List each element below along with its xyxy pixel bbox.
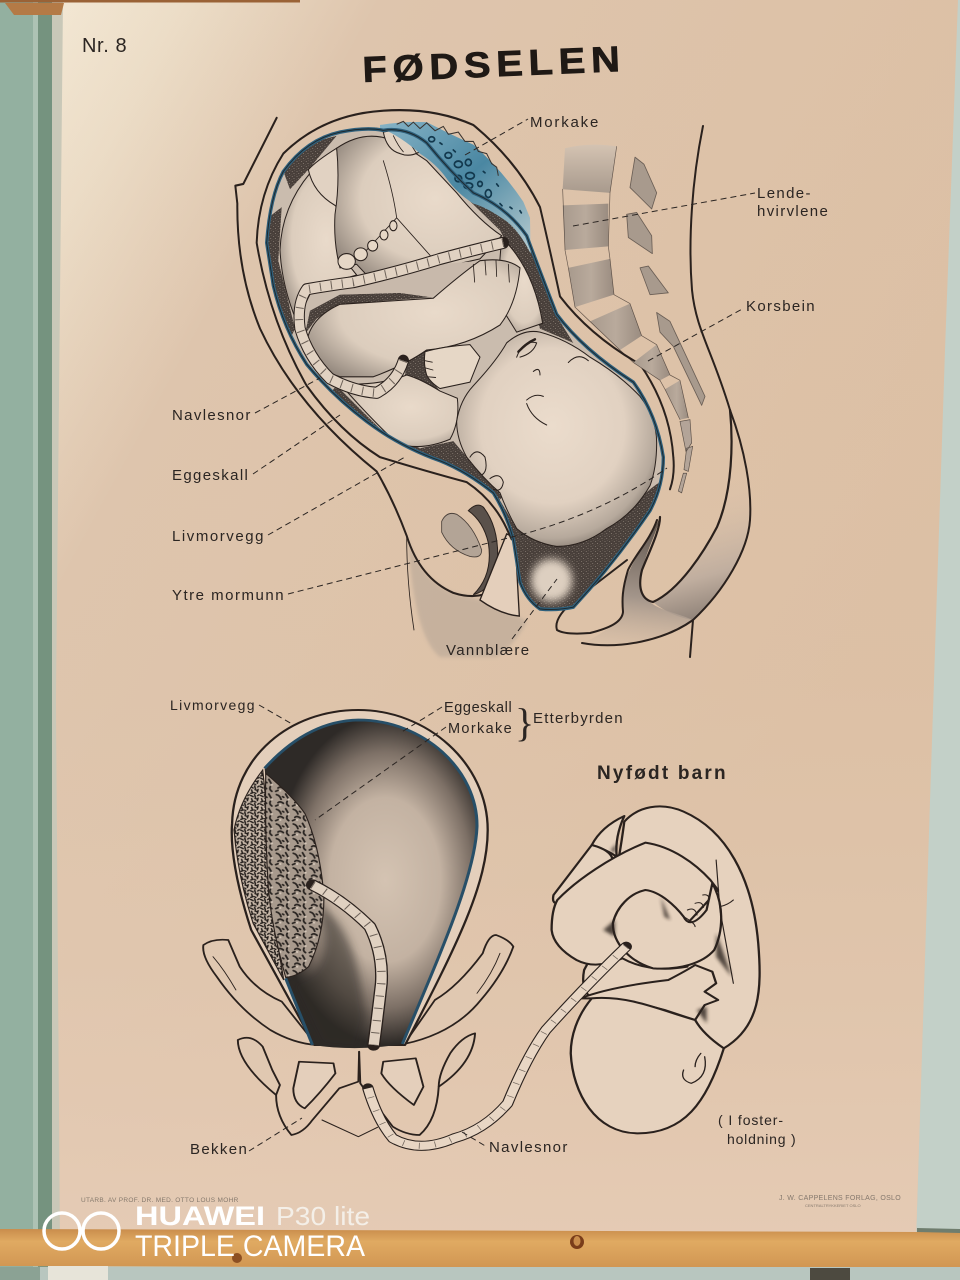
credit left: UTARB. AV PROF. DR. MED. OTTO LOUS MOHR — [81, 1197, 239, 1204]
label: Eggeskall — [172, 415, 340, 484]
label: Ytre mormunn: Ytre mormunn — [172, 587, 285, 604]
note: I fosterholdning: holdning ) — [727, 1131, 796, 1147]
title: FØDSELEN — [362, 40, 621, 91]
newborn shoulder — [592, 816, 624, 857]
uterine decidua texture — [234, 770, 284, 980]
illustration: uterus after birth with pelvis — [203, 710, 760, 1146]
fetal head — [457, 331, 657, 546]
label: Navlesnor lower — [462, 1132, 569, 1156]
credit right: J. W. CAPPELENS FORLAG, OSLO — [779, 1195, 901, 1202]
cavity base — [272, 130, 662, 517]
label: Lendehvirvlene: hvirvlene — [757, 203, 829, 220]
label: Navlesnor — [172, 378, 320, 424]
iliac wings — [203, 935, 513, 1045]
back, buttock and perineum outlines — [556, 126, 750, 657]
umbilical cord inside uterus — [312, 885, 382, 1045]
label: Vannblære — [446, 579, 557, 659]
label: Morkake lower — [315, 721, 513, 820]
label: Livmorvegg lower: Livmorvegg — [170, 697, 256, 713]
uterine wall outer — [257, 110, 674, 539]
label: Livmorvegg: Livmorvegg — [172, 528, 265, 545]
label: Navlesnor: Navlesnor — [172, 407, 252, 424]
wall below roller — [0, 1266, 960, 1280]
water bag — [531, 559, 572, 602]
newborn shading — [603, 843, 731, 1023]
credit right: CENTRALTRYKKERIET OSLO — [805, 1203, 861, 1208]
label: Lendehvirvlene: Lende- — [757, 185, 812, 202]
spinous processes — [627, 157, 705, 405]
label: Eggeskall: Eggeskall — [172, 467, 249, 484]
note: I fosterholdning: ( I foster- — [718, 1112, 784, 1128]
light tissue between cord and arm — [340, 261, 480, 297]
note: I fosterholdning — [718, 1112, 796, 1147]
fetal upper leg — [308, 148, 338, 206]
umbilical cord outside — [368, 947, 626, 1146]
label: Vannblære: Vannblære — [446, 642, 530, 659]
pelvis lower — [238, 1033, 475, 1137]
placenta blue — [380, 121, 531, 254]
blue membrane — [267, 129, 663, 610]
bottom wooden roller — [0, 1228, 960, 1271]
label: Livmorvegg — [172, 457, 405, 545]
bracket: Etterbyrden — [515, 700, 624, 745]
bracket: Etterbyrden: } — [515, 700, 534, 745]
lumbar vertebrae and sacrum — [563, 145, 693, 493]
fetal lower thigh — [340, 375, 458, 447]
uterine wall outer — [232, 710, 488, 1045]
heading: Nyfødt barn: Nyfødt barn — [597, 763, 728, 784]
label: Morkake — [465, 114, 600, 155]
camera watermark — [44, 1201, 370, 1263]
label: Eggeskall lower: Eggeskall — [444, 700, 512, 716]
arm and hand — [307, 260, 520, 377]
newborn hand — [580, 965, 718, 1020]
label: Bekken: Bekken — [190, 1141, 248, 1158]
camera watermark: P30 lite — [276, 1201, 370, 1231]
fetal buttock left — [280, 173, 357, 321]
label: Morkake lower: Morkake — [448, 721, 513, 737]
top roller remnant — [0, 0, 300, 15]
poster number: Nr. 8 — [82, 35, 127, 57]
label: Korsbein: Korsbein — [746, 298, 816, 315]
illustration: birth cross-section — [235, 110, 705, 657]
bladder and pubic bone — [442, 505, 519, 616]
toes — [338, 221, 397, 269]
amniotic speckled spaces — [263, 136, 673, 614]
newborn arm left — [553, 845, 613, 903]
uterine cavity — [265, 720, 477, 1050]
label: Navlesnor lower: Navlesnor — [489, 1139, 569, 1156]
label: Eggeskall lower — [400, 700, 512, 733]
placenta — [265, 773, 324, 977]
lower foot — [424, 345, 480, 389]
newborn baby — [552, 806, 760, 1133]
credit right — [779, 1195, 901, 1208]
camera watermark: TRIPLE CAMERA — [135, 1230, 365, 1263]
label: Korsbein — [648, 298, 816, 361]
bracket: Etterbyrden: Etterbyrden — [533, 710, 624, 727]
newborn head — [571, 998, 724, 1133]
newborn lower leg and foot — [613, 883, 721, 969]
label: Ytre mormunn — [172, 468, 667, 604]
newborn ear — [683, 1053, 705, 1083]
camera watermark: HUAWEI — [135, 1201, 265, 1231]
front body outline and soft tissue — [235, 118, 527, 657]
label: Livmorvegg lower — [170, 697, 292, 724]
label: Morkake: Morkake — [530, 114, 600, 131]
label: Bekken — [190, 1118, 302, 1158]
uterine cavity with fetus — [268, 130, 662, 608]
newborn body — [583, 806, 760, 1048]
umbilical cord — [299, 243, 503, 393]
fetal trunk behind — [497, 237, 543, 332]
upper foot toes by placenta — [382, 132, 419, 156]
newborn upper leg — [552, 843, 718, 969]
label: Lendehvirvlene — [573, 185, 829, 226]
